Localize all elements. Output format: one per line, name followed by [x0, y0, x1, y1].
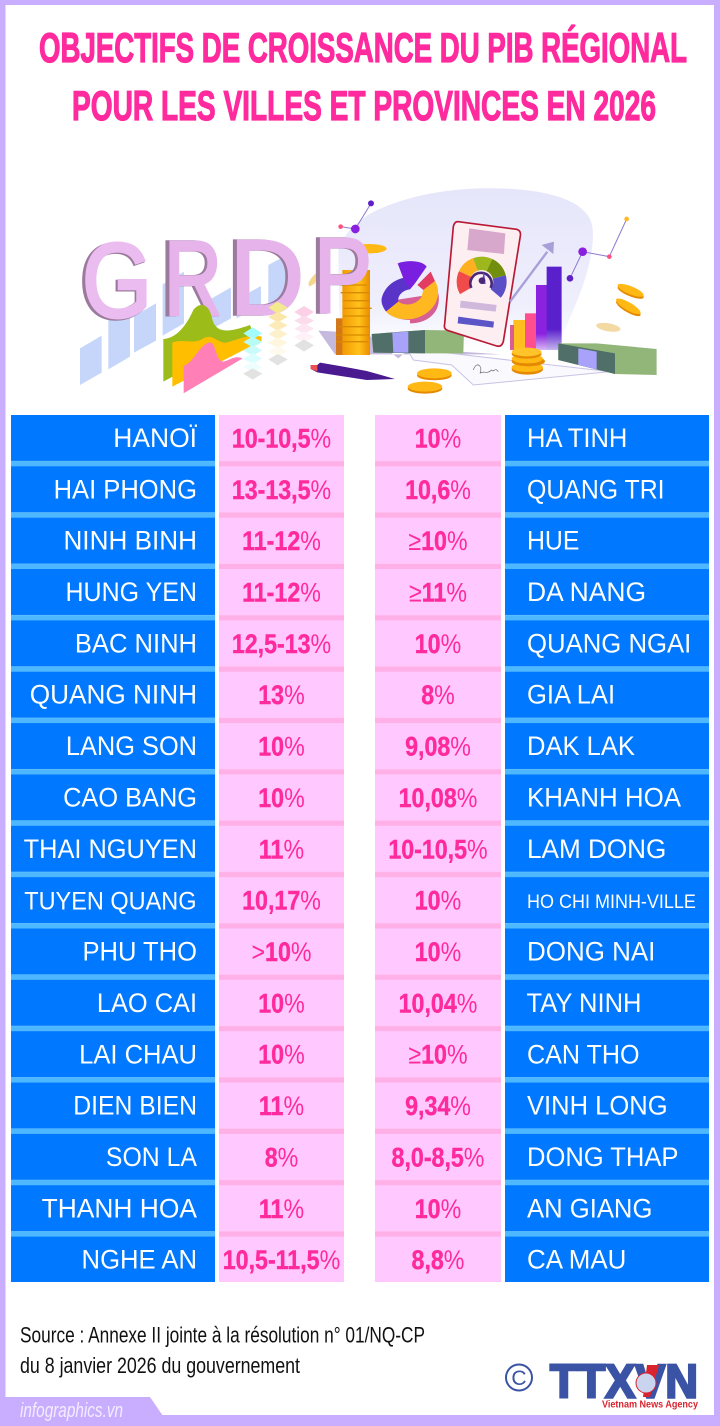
row: Lang Son / Dak Lak: DAK LAK	[527, 730, 635, 761]
row: Tuyen Quang / Ho Chi Minh-Ville: 10,17%	[242, 886, 321, 916]
row: Bac Ninh / Quang Ngai: BAC NINH	[75, 628, 197, 659]
GRDP letters: G	[79, 223, 151, 341]
row: Thanh Hoa / An Giang: AN GIANG	[527, 1193, 652, 1223]
row: Thanh Hoa / An Giang	[42, 1193, 652, 1224]
row: Phu Tho / Dong Nai: DONG NAI	[527, 936, 655, 967]
GRDP letters: R	[160, 220, 220, 338]
row: Lang Son / Dak Lak: 9,08%	[405, 732, 471, 762]
row: Hanoï / Ha Tinh: HA TINH	[527, 422, 627, 453]
row: Thai Nguyen / Lam Dong: 11%	[259, 835, 304, 865]
row: Son La / Dong Thap: 8%	[265, 1143, 298, 1173]
GRDP letters	[79, 219, 304, 341]
logo: TTXVN: Vietnam News Agency	[602, 1398, 698, 1410]
logo: TTXVN: TTXVN	[550, 1354, 698, 1408]
row: Hai Phong / Quang Tri: HAI PHONG	[54, 474, 197, 504]
row: Tuyen Quang / Ho Chi Minh-Ville: HO CHI MINH-VILLE	[527, 891, 696, 912]
row: Tuyen Quang / Ho Chi Minh-Ville: TUYEN QUANG	[24, 888, 196, 916]
background blob	[338, 188, 593, 352]
row: Thai Nguyen / Lam Dong: LAM DONG	[527, 833, 666, 864]
row: Quang Ninh / Gia Lai	[30, 679, 615, 711]
row: Lang Son / Dak Lak: LANG SON	[66, 730, 197, 761]
row: Hai Phong / Quang Tri: QUANG TRI	[527, 475, 665, 505]
row: Phu Tho / Dong Nai: 10%	[415, 937, 461, 967]
row: Bac Ninh / Quang Ngai: QUANG NGAI	[527, 628, 691, 659]
row: Ninh Binh / Hue	[63, 525, 579, 557]
footer tab: infographics.vn: infographics.vn	[20, 1400, 123, 1422]
row: Bac Ninh / Quang Ngai	[75, 628, 691, 659]
row: Lao Cai / Tay Ninh: 10,04%	[399, 989, 477, 1019]
GRDP letters: D	[230, 219, 304, 337]
row: Dien Bien / Vinh Long: DIEN BIEN	[73, 1092, 197, 1121]
letter P: P	[310, 217, 370, 335]
row: Lang Son / Dak Lak: 10%	[258, 732, 305, 762]
row: Dien Bien / Vinh Long: 9,34%	[405, 1092, 471, 1122]
rising arrow	[510, 252, 547, 302]
source note: du 8 janvier 2026 du gouvernement	[20, 1353, 300, 1378]
GRDP letters: R	[164, 220, 222, 338]
row: Nghe An / Ca Mau: 8,8%	[412, 1246, 464, 1276]
row: Quang Ninh / Gia Lai: 13%	[258, 681, 305, 711]
row: Hung Yen / Da Nang: HUNG YEN	[65, 576, 197, 607]
row: Lai Chau / Can Tho: ≥10%	[408, 1040, 468, 1070]
row: Thanh Hoa / An Giang: 11%	[259, 1194, 304, 1224]
row: Cao Bang / Khanh Hoa: KHANH HOA	[527, 782, 681, 813]
row: Ninh Binh / Hue: HUE	[527, 527, 579, 556]
row: Bac Ninh / Quang Ngai: 12,5-13%	[232, 629, 331, 659]
source note	[20, 1322, 425, 1378]
row: Son La / Dong Thap	[106, 1141, 678, 1173]
row: Ninh Binh / Hue: 11-12%	[242, 527, 321, 557]
pen	[311, 363, 395, 380]
row: Lang Son / Dak Lak	[66, 730, 635, 762]
letter P: P	[314, 217, 372, 335]
row: Phu Tho / Dong Nai: >10%	[251, 937, 312, 967]
pale blue background bars	[80, 253, 290, 385]
row: Hai Phong / Quang Tri	[54, 474, 665, 505]
row: Lao Cai / Tay Ninh: LAO CAI	[97, 987, 197, 1018]
row: Lai Chau / Can Tho	[79, 1039, 640, 1070]
row: Lao Cai / Tay Ninh: 10%	[258, 989, 305, 1019]
row: Phu Tho / Dong Nai	[82, 936, 655, 967]
row: Nghe An / Ca Mau: 10,5-11,5%	[223, 1246, 340, 1276]
row: Thanh Hoa / An Giang: THANH HOA	[42, 1193, 197, 1223]
row: Nghe An / Ca Mau	[82, 1244, 626, 1276]
network dots	[341, 203, 371, 229]
row: Ninh Binh / Hue: NINH BINH	[63, 525, 197, 556]
row: Nghe An / Ca Mau: NGHE AN	[82, 1244, 197, 1275]
row: Phu Tho / Dong Nai: PHU THO	[82, 936, 197, 967]
row: Hai Phong / Quang Tri: 13-13,5%	[232, 475, 331, 505]
row: Son La / Dong Thap: 8,0-8,5%	[392, 1143, 484, 1173]
icon: copyright	[506, 1364, 532, 1390]
left money stack	[372, 330, 464, 353]
row: Lao Cai / Tay Ninh	[97, 987, 642, 1019]
row: Lao Cai / Tay Ninh: TAY NINH	[526, 987, 642, 1018]
row: Son La / Dong Thap: SON LA	[106, 1143, 198, 1172]
row: Hanoï / Ha Tinh	[113, 422, 627, 454]
coin stack under the P	[336, 318, 369, 355]
row: Hung Yen / Da Nang: DA NANG	[527, 577, 646, 607]
row: Quang Ninh / Gia Lai: QUANG NINH	[30, 679, 197, 710]
row: Hanoï / Ha Tinh: 10%	[415, 424, 461, 454]
row: Bac Ninh / Quang Ngai: 10%	[415, 629, 461, 659]
row: Cao Bang / Khanh Hoa	[63, 782, 681, 813]
row: Cao Bang / Khanh Hoa: CAO BANG	[63, 782, 197, 813]
row: Thanh Hoa / An Giang: 10%	[415, 1194, 461, 1224]
row: Hanoï / Ha Tinh: HANOÏ	[113, 423, 198, 453]
row: Tuyen Quang / Ho Chi Minh-Ville: 10%	[415, 886, 461, 916]
row: Hung Yen / Da Nang	[65, 576, 646, 608]
row: Cao Bang / Khanh Hoa: 10%	[258, 783, 305, 813]
row: Quang Ninh / Gia Lai: 8%	[421, 681, 455, 711]
row: Thai Nguyen / Lam Dong	[24, 833, 666, 865]
row: Son La / Dong Thap: DONG THAP	[527, 1141, 678, 1172]
row: Dien Bien / Vinh Long	[73, 1090, 668, 1122]
row: Dien Bien / Vinh Long: 11%	[259, 1092, 304, 1122]
donut chart	[384, 293, 439, 323]
row: Dien Bien / Vinh Long: VINH LONG	[527, 1090, 668, 1121]
GRDP letters: G	[82, 222, 152, 340]
row: Thai Nguyen / Lam Dong: THAI NGUYEN	[24, 833, 197, 864]
row: Cao Bang / Khanh Hoa: 10,08%	[399, 783, 477, 813]
row: Hung Yen / Da Nang: ≥11%	[409, 578, 467, 608]
bar chart	[513, 320, 525, 350]
GRDP letters: D	[226, 219, 302, 337]
row: Ninh Binh / Hue: ≥10%	[408, 527, 468, 557]
row: Nghe An / Ca Mau: CA MAU	[527, 1244, 626, 1275]
row: Hai Phong / Quang Tri: 10,6%	[405, 475, 471, 505]
phone	[444, 222, 520, 346]
diamonds and layered area charts	[163, 273, 318, 393]
row: Lai Chau / Can Tho: LAI CHAU	[79, 1039, 197, 1070]
row: Lai Chau / Can Tho: CAN THO	[527, 1039, 640, 1070]
row: Hung Yen / Da Nang: 11-12%	[242, 578, 321, 608]
row: Tuyen Quang / Ho Chi Minh-Ville	[24, 886, 696, 916]
title	[39, 24, 687, 129]
right money stack	[558, 343, 657, 375]
gauge	[463, 263, 500, 293]
row: Thai Nguyen / Lam Dong: 10-10,5%	[388, 835, 488, 865]
source note: Source : Annexe II jointe à la résolution n° 01/NQ-CP	[20, 1322, 425, 1348]
row: Lai Chau / Can Tho: 10%	[258, 1040, 305, 1070]
table column backgrounds	[11, 415, 709, 1282]
row: Hanoï / Ha Tinh: 10-10,5%	[232, 424, 331, 454]
coins	[408, 281, 645, 394]
icon: copyright: C	[511, 1367, 527, 1390]
row: Quang Ninh / Gia Lai: GIA LAI	[527, 679, 615, 710]
platform and paper	[318, 331, 502, 358]
right-hand objects	[311, 200, 657, 394]
illustration: GRDP	[79, 188, 657, 394]
